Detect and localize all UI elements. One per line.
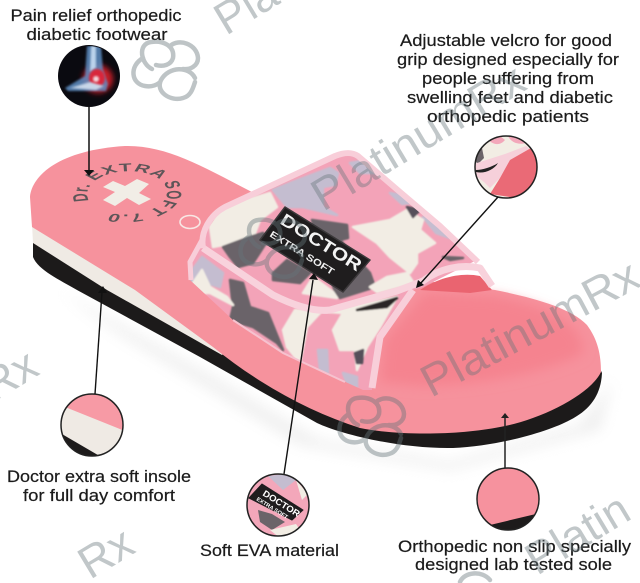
text: EVA: Soft EVA material xyxy=(200,542,339,560)
rubber brand badge xyxy=(260,207,370,292)
icon: insole layers xyxy=(60,393,124,457)
strap and upper xyxy=(185,150,480,395)
partial watermark ring xyxy=(460,573,490,582)
opening shadow xyxy=(420,275,492,293)
shoe ground shadow xyxy=(60,290,612,470)
icon: badge closeup xyxy=(247,474,309,538)
callout: sole xyxy=(398,413,632,574)
text: velcro: Adjustable velcro for good xyxy=(400,32,612,50)
callout: insole xyxy=(7,286,191,505)
upper edge trim xyxy=(372,290,413,388)
heading: pain relief: diabetic footwear xyxy=(26,26,168,44)
leader line xyxy=(84,107,94,176)
icon: foot x-ray xyxy=(58,45,120,107)
size mark xyxy=(180,216,200,228)
slipper illustration xyxy=(30,146,602,448)
callout: velcro xyxy=(397,32,620,288)
text: velcro: people suffering from xyxy=(422,70,594,88)
camo patches xyxy=(190,160,463,387)
cross xyxy=(103,179,151,206)
flap trim xyxy=(203,248,492,310)
circular brand text: Dr. EXTRA SOFT 7.0 xyxy=(73,163,182,222)
watermarks: Platin xyxy=(516,483,639,583)
text: sole: Orthopedic non slip specially xyxy=(398,538,632,556)
arrow: sole xyxy=(501,413,509,468)
watermarks: PlatinumRx xyxy=(302,53,534,221)
text: velcro: swelling feet and diabetic xyxy=(407,89,613,107)
text: velcro: grip designed especially for xyxy=(397,51,620,69)
black outsole xyxy=(33,240,602,448)
text: sole: designed lab tested sole xyxy=(415,556,612,574)
arrow: insole xyxy=(95,286,107,394)
text: insole: for full day comfort xyxy=(23,487,175,505)
heel stamp xyxy=(73,163,201,230)
footbed inner shade xyxy=(380,292,583,386)
icon: badge closeup: DOCTOR xyxy=(261,488,302,519)
arrow: velcro xyxy=(416,197,498,288)
callout: pain relief xyxy=(10,7,182,176)
rubber brand badge: DOCTOR xyxy=(277,209,366,275)
pink footbed xyxy=(30,146,601,434)
icon: sole closeup xyxy=(476,467,540,531)
watermarks: PlatinumRx xyxy=(412,249,640,407)
white midsole xyxy=(32,224,240,355)
callout: EVA material xyxy=(200,273,339,560)
rubber brand badge: EXTRA SOFT xyxy=(267,229,336,278)
heading: pain relief: Pain relief orthopedic xyxy=(10,7,182,25)
text: insole: Doctor extra soft insole xyxy=(7,468,191,486)
text: velcro: orthopedic patients xyxy=(427,108,589,126)
arrow: EVA xyxy=(284,273,318,474)
icon: badge closeup: EXTRA SOFT xyxy=(255,497,289,521)
icon: velcro closeup xyxy=(474,136,540,200)
